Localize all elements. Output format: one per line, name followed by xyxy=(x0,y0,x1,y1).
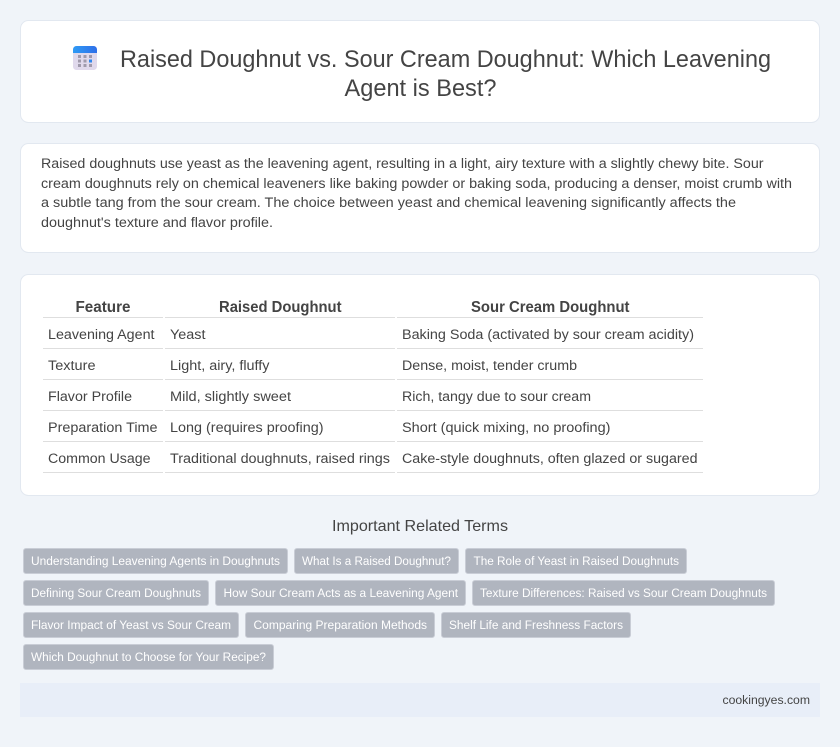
table row: leavening agent: Yeast xyxy=(170,327,206,343)
tag xyxy=(294,548,458,574)
table header xyxy=(43,299,703,318)
table header: Feature xyxy=(76,299,131,316)
table row: flavor profile: Rich, tangy due to sour cream xyxy=(402,389,591,405)
table row: texture: Texture xyxy=(48,358,96,374)
tag xyxy=(246,612,434,638)
tag: Defining Sour Cream Doughnuts xyxy=(31,586,201,600)
footer bar xyxy=(20,683,820,717)
text block: introduction paragraph: cream doughnuts rely on chemical leaveners like baking powder or baking soda, producing a denser, moist crumb with xyxy=(41,176,792,192)
tag: Which Doughnut to Choose for Your Recipe? xyxy=(31,650,266,664)
footer bar: cookingyes.com xyxy=(722,693,810,707)
table row: texture xyxy=(43,358,703,380)
icon: calendar xyxy=(73,46,97,70)
heading: important related terms: Important Related Terms xyxy=(332,518,508,535)
tag xyxy=(24,548,288,574)
table row: common usage: Traditional doughnuts, raised rings xyxy=(170,451,390,467)
text block: introduction paragraph: Raised doughnuts use yeast as the leavening agent, resulting in a light, airy texture with a slightly chewy bite. Sour xyxy=(41,156,764,172)
table row: texture: Dense, moist, tender crumb xyxy=(402,358,577,374)
table row: common usage: Common Usage xyxy=(48,451,151,467)
tag xyxy=(24,612,238,638)
table row: leavening agent: Leavening Agent xyxy=(48,327,155,343)
panel: title card xyxy=(20,20,820,122)
table row: preparation time: Long (requires proofing) xyxy=(170,420,324,436)
tag: Texture Differences: Raised vs Sour Cream Doughnuts xyxy=(480,586,767,600)
title xyxy=(120,46,771,102)
tag: Comparing Preparation Methods xyxy=(254,618,427,632)
table row: texture: Light, airy, fluffy xyxy=(170,358,270,374)
text block: introduction paragraph: a subtle tang from the sour cream. The choice between yeast and chemical leavening significantly affects the xyxy=(41,195,736,211)
table row: common usage xyxy=(43,451,703,473)
panel: comparison table xyxy=(20,274,820,496)
table header: Sour Cream Doughnut xyxy=(471,299,630,316)
table row: preparation time: Preparation Time xyxy=(48,420,158,436)
table row: preparation time xyxy=(43,420,703,442)
table row: flavor profile xyxy=(43,389,703,411)
table header: Raised Doughnut xyxy=(219,299,342,316)
tag xyxy=(216,580,466,606)
tag: What Is a Raised Doughnut? xyxy=(302,554,451,568)
panel: introduction xyxy=(20,144,820,252)
tag: How Sour Cream Acts as a Leavening Agent xyxy=(224,586,459,600)
text block: introduction paragraph xyxy=(41,156,792,231)
tag xyxy=(472,580,774,606)
tag xyxy=(24,580,208,606)
table row: common usage: Cake-style doughnuts, often glazed or sugared xyxy=(402,451,698,467)
tag: Shelf Life and Freshness Factors xyxy=(449,618,623,632)
tag xyxy=(24,644,274,670)
title: Agent is Best? xyxy=(344,75,496,102)
tag xyxy=(442,612,630,638)
table row: preparation time: Short (quick mixing, no proofing) xyxy=(402,420,610,436)
table row: leavening agent: Baking Soda (activated by sour cream acidity) xyxy=(402,327,694,343)
tag: The Role of Yeast in Raised Doughnuts xyxy=(474,554,679,568)
table row: flavor profile: Flavor Profile xyxy=(48,389,132,405)
table row: flavor profile: Mild, slightly sweet xyxy=(170,389,291,405)
table row: leavening agent xyxy=(43,327,703,349)
related term tags xyxy=(24,548,774,670)
tag: Understanding Leavening Agents in Doughnuts xyxy=(31,554,280,568)
tag xyxy=(466,548,686,574)
title: Raised Doughnut vs. Sour Cream Doughnut: Which Leavening xyxy=(120,46,771,73)
text block: introduction paragraph: doughnut's texture and flavor profile. xyxy=(41,215,273,231)
tag: Flavor Impact of Yeast vs Sour Cream xyxy=(31,618,231,632)
